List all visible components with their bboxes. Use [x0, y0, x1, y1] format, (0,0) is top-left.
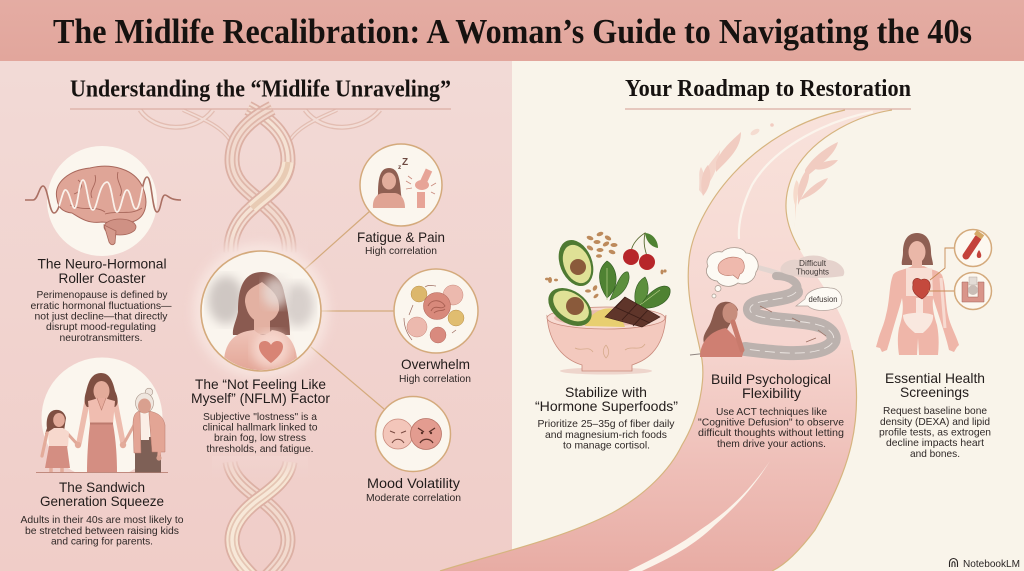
text: neuro-hormonal description — [30, 290, 172, 344]
heading: hormone superfoods — [535, 385, 678, 414]
text: neuro-hormonal description: erratic hormonal fluctuations— — [30, 301, 172, 312]
text: sandwich generation description — [20, 515, 184, 548]
text: psychological flexibility description: them drive your actions. — [717, 439, 826, 450]
icon: woman resting chin on hand — [700, 302, 744, 357]
panel: hormone superfoods — [535, 231, 678, 452]
panel: fatigue and pain — [357, 144, 445, 257]
heading and correlation: fatigue: High correlation — [365, 246, 437, 257]
text: health screenings description: decline impacts heart — [886, 438, 984, 449]
heading: psychological flexibility — [711, 372, 831, 401]
heading: NFLM: Myself” (NFLM) Factor — [191, 391, 330, 406]
text: hormone superfoods description: Prioritize 25–35g of fiber daily — [538, 419, 675, 430]
heading: NFLM — [191, 377, 330, 406]
text: NFLM description: thresholds, and fatigue. — [206, 444, 314, 455]
text: hormone superfoods description: to manage cortisol. — [563, 440, 650, 452]
NotebookLM watermark: NotebookLM — [963, 558, 1020, 570]
cloud: difficult thoughts: Difficult — [799, 259, 827, 268]
heading: hormone superfoods: “Hormone Superfoods” — [535, 399, 678, 414]
cloud: difficult thoughts — [781, 256, 844, 278]
roadmap ribbon path — [440, 110, 892, 571]
text: psychological flexibility description — [698, 407, 844, 450]
heading and correlation: overwhelm: Overwhelm — [401, 357, 470, 372]
bubble: defusion: defusion — [808, 294, 838, 304]
icon: sad and angry faces — [376, 396, 450, 472]
panel: essential health screenings — [876, 230, 992, 460]
header band with title — [0, 0, 1024, 61]
panel: NFLM factor — [191, 243, 330, 455]
heading and correlation: overwhelm: High correlation — [399, 374, 471, 385]
text: sandwich generation description: and caring for parents. — [51, 536, 153, 548]
text: neuro-hormonal description: Perimenopause is defined by — [36, 290, 168, 301]
icon: tired woman and sore joint — [360, 144, 442, 226]
heading: health screenings — [885, 371, 985, 400]
panel: neuro-hormonal roller coaster — [25, 146, 181, 344]
text: hormone superfoods description: and magnesium-rich foods — [545, 430, 667, 441]
decorative helix strands: bottom — [212, 456, 308, 571]
text: health screenings description: Request baseline bone — [883, 406, 987, 417]
heading: NFLM: The “Not Feeling Like — [195, 377, 326, 392]
icon: bowl of superfoods — [541, 231, 670, 374]
heading: psychological flexibility: Build Psychological — [711, 372, 831, 387]
heading: sandwich generation: The Sandwich — [59, 480, 145, 495]
text: neuro-hormonal description: not just decline—that directly — [34, 312, 168, 322]
text: psychological flexibility description: "Cognitive Defusion" to observe — [698, 418, 844, 428]
heading: sandwich generation — [40, 480, 164, 509]
icon: woman watching river of thoughts — [690, 248, 844, 357]
text: health screenings description: profile tests, as extrogen — [879, 428, 991, 438]
text: hormone superfoods description — [538, 419, 675, 452]
decorative leaves along the ribbon — [699, 123, 838, 228]
icon: tired woman and sore joint: Z — [402, 157, 408, 168]
bubble: defusion — [796, 288, 842, 310]
icon: NotebookLM logo — [950, 558, 958, 567]
heading and correlation: mood: Mood Volatility — [367, 476, 460, 491]
heading: health screenings: Screenings — [900, 385, 969, 400]
heading and correlation: fatigue: Fatigue & Pain — [357, 230, 445, 245]
icon: bone density scanner — [954, 272, 992, 310]
heading and correlation: fatigue — [357, 230, 445, 257]
panel: overwhelm — [394, 269, 478, 385]
text: NFLM description — [202, 412, 318, 455]
text: sandwich generation description: be stretched between raising kids — [25, 526, 179, 537]
heading: sandwich generation: Generation Squeeze — [40, 494, 164, 509]
icon: brain with hormone wave — [25, 146, 181, 256]
cloud: difficult thoughts: Thoughts — [796, 268, 829, 276]
text: health screenings description: and bones. — [910, 449, 960, 460]
icon: woman with fading face and heart — [193, 243, 329, 379]
decorative helix strands: top — [140, 108, 380, 256]
heading and correlation: overwhelm — [399, 357, 471, 385]
icon: thought bubble with brain — [706, 248, 758, 298]
text: NFLM description: Subjective "lostness" is a — [203, 412, 317, 423]
panel: sandwich generation squeeze — [20, 358, 184, 548]
text: NFLM description: clinical hallmark linked to — [202, 422, 318, 434]
icon: swirling worry bubbles — [394, 269, 478, 353]
heading: Your Roadmap to Restoration: Your Roadmap to Restoration — [625, 75, 911, 102]
heading: health screenings: Essential Health — [885, 371, 985, 386]
icon: blood test vial — [954, 230, 992, 266]
text: psychological flexibility description: difficult thoughts without letting — [698, 428, 844, 439]
icon: three generations holding hands — [36, 358, 168, 478]
heading: Understanding the Midlife Unraveling: Understanding the “Midlife Unraveling” — [70, 76, 451, 102]
text: neuro-hormonal description: disrupt mood-regulating — [46, 322, 156, 333]
panel: mood volatility — [366, 396, 461, 504]
left panel background — [0, 61, 512, 571]
text: health screenings description: density (DEXA) and lipid — [880, 417, 990, 428]
icon: tired woman and sore joint: z — [398, 164, 402, 171]
panel: psychological flexibility — [690, 248, 844, 450]
heading: hormone superfoods: Stabilize with — [565, 385, 647, 400]
icon: female body with heart and bones — [876, 230, 992, 355]
heading and correlation: mood: Moderate correlation — [366, 493, 461, 504]
right panel background — [512, 61, 1024, 571]
heading: neuro-hormonal: Roller Coaster — [58, 271, 146, 286]
text: sandwich generation description: Adults in their 40s are most likely to — [20, 515, 184, 526]
heading: psychological flexibility: Flexibility — [742, 386, 801, 401]
heading: neuro-hormonal: The Neuro-Hormonal — [38, 256, 166, 272]
text: neuro-hormonal description: neurotransmitters. — [60, 333, 142, 344]
heading: neuro-hormonal — [38, 256, 166, 286]
text: NFLM description: brain fog, low stress — [214, 433, 306, 444]
text: health screenings description — [879, 406, 991, 460]
text: psychological flexibility description: Use ACT techniques like — [716, 407, 827, 418]
heading and correlation: mood — [366, 476, 461, 504]
connector lines from NFLM to symptoms — [305, 211, 394, 409]
